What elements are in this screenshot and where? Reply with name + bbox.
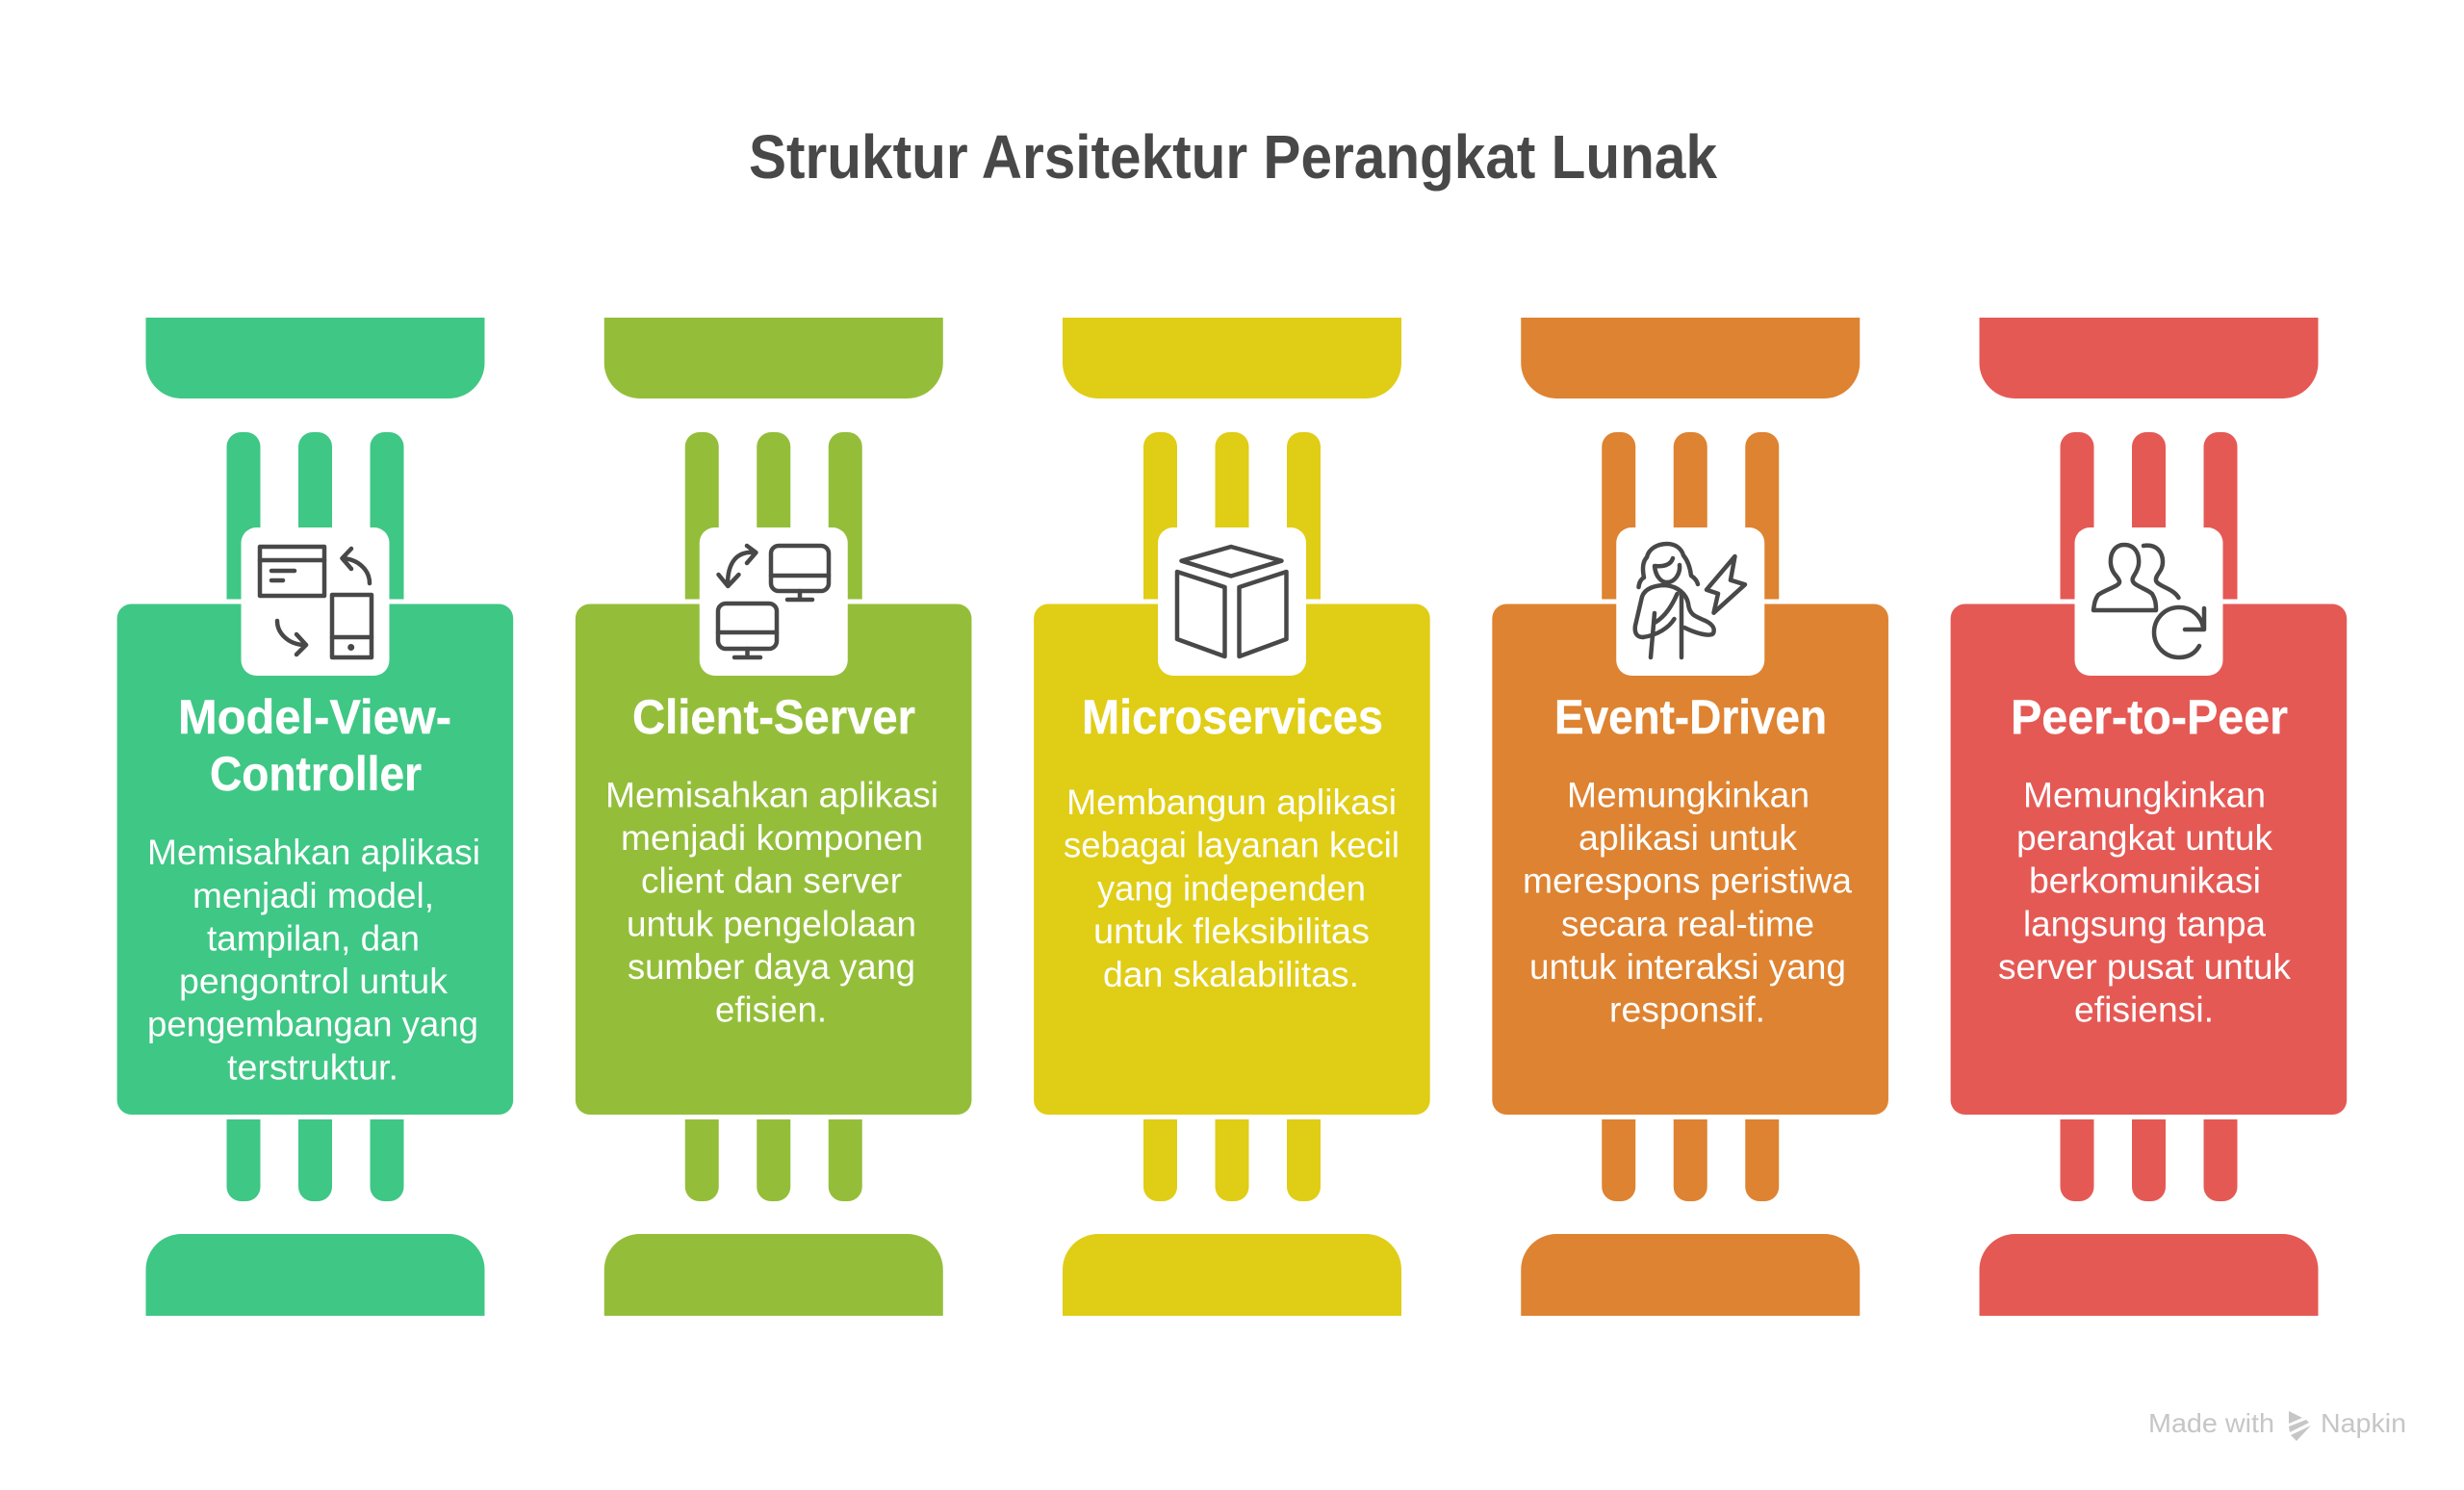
description: Memisahkan aplikasi: [147, 833, 480, 872]
title: Struktur Arsitektur Perangkat Lunak: [749, 122, 1717, 192]
heading: Client-Server: [632, 690, 915, 744]
description: [1998, 775, 2291, 1030]
main card: [1951, 604, 2347, 1115]
heading: Model-View-: [178, 690, 451, 744]
panel: Client-Server: [576, 318, 971, 1316]
bottom cap: [1979, 1234, 2318, 1316]
watermark: Made with Napkin: Napkin: [2321, 1408, 2406, 1438]
upper connector bars: [1602, 432, 1779, 599]
top cap: [604, 318, 943, 398]
panel: Peer-to-Peer: [1951, 318, 2347, 1316]
description: Memungkinkan: [2023, 775, 2266, 814]
panel: Model-View-Controller: [117, 318, 513, 1316]
description: sebagai layanan kecil: [1064, 826, 1399, 865]
icon: Napkin logo: [2289, 1411, 2311, 1441]
bottom cap: [1521, 1234, 1860, 1316]
description: Membangun aplikasi: [1066, 783, 1397, 822]
top cap: [146, 318, 485, 398]
upper connector bars: [685, 432, 862, 599]
main card: [576, 604, 971, 1115]
icon: view window, phone and cycle arrows: [241, 527, 389, 676]
description: langsung tanpa: [2023, 904, 2266, 943]
watermark: Made with Napkin: [2148, 1408, 2406, 1441]
description: [147, 833, 480, 1088]
heading: Event-Driven: [1554, 690, 1827, 744]
icon: two monitors with exchange arrows: [700, 527, 848, 676]
main card: [117, 604, 513, 1115]
watermark: Made with Napkin: Made with: [2148, 1408, 2274, 1438]
description: [1064, 783, 1399, 994]
description: client dan server: [641, 861, 902, 901]
top cap: [1521, 318, 1860, 398]
description: [605, 775, 938, 1030]
bottom cap: [146, 1234, 485, 1316]
description: untuk pengelolaan: [627, 904, 916, 943]
top cap: [1063, 318, 1401, 398]
description: responsif.: [1609, 990, 1765, 1030]
description: Memungkinkan: [1567, 775, 1810, 814]
heading: Controller: [210, 747, 422, 801]
lower connector bars: [685, 1119, 862, 1201]
description: merespons peristiwa: [1523, 861, 1852, 901]
top cap: [1979, 318, 2318, 398]
description: pengontrol untuk: [179, 962, 448, 1001]
description: berkomunikasi: [2029, 861, 2261, 901]
lower connector bars: [227, 1119, 404, 1201]
description: secara real-time: [1561, 904, 1814, 943]
lower connector bars: [2060, 1119, 2237, 1201]
icon: figure with lightning bolt: [1616, 527, 1764, 676]
description: aplikasi untuk: [1578, 818, 1798, 858]
description: menjadi model,: [192, 876, 434, 915]
panel: Microservices: [1034, 318, 1430, 1316]
upper connector bars: [227, 432, 404, 599]
bottom cap: [604, 1234, 943, 1316]
upper connector bars: [1143, 432, 1321, 599]
panel: Event-Driven: [1492, 318, 1888, 1316]
main card: [1492, 604, 1888, 1115]
description: dan skalabilitas.: [1103, 955, 1359, 994]
heading: Microservices: [1082, 690, 1383, 744]
heading: [178, 690, 451, 801]
description: Memisahkan aplikasi: [605, 775, 938, 814]
description: perangkat untuk: [2016, 818, 2273, 858]
bottom cap: [1063, 1234, 1401, 1316]
description: yang independen: [1097, 868, 1366, 908]
description: efisien.: [715, 990, 827, 1030]
description: efisiensi.: [2074, 990, 2214, 1030]
description: untuk fleksibilitas: [1093, 912, 1370, 951]
lower connector bars: [1143, 1119, 1321, 1201]
description: [1523, 775, 1852, 1030]
icon: two people with refresh arrow: [2075, 527, 2223, 676]
main card: [1034, 604, 1430, 1115]
description: terstruktur.: [227, 1047, 398, 1088]
heading: Peer-to-Peer: [2011, 690, 2288, 744]
description: menjadi komponen: [621, 818, 923, 858]
description: pengembangan yang: [147, 1005, 478, 1043]
description: tampilan, dan: [207, 918, 420, 959]
description: sumber daya yang: [628, 947, 915, 987]
upper connector bars: [2060, 432, 2237, 599]
lower connector bars: [1602, 1119, 1779, 1201]
description: server pusat untuk: [1998, 947, 2291, 987]
description: untuk interaksi yang: [1529, 947, 1846, 987]
icon: exploded cube: [1158, 527, 1306, 676]
